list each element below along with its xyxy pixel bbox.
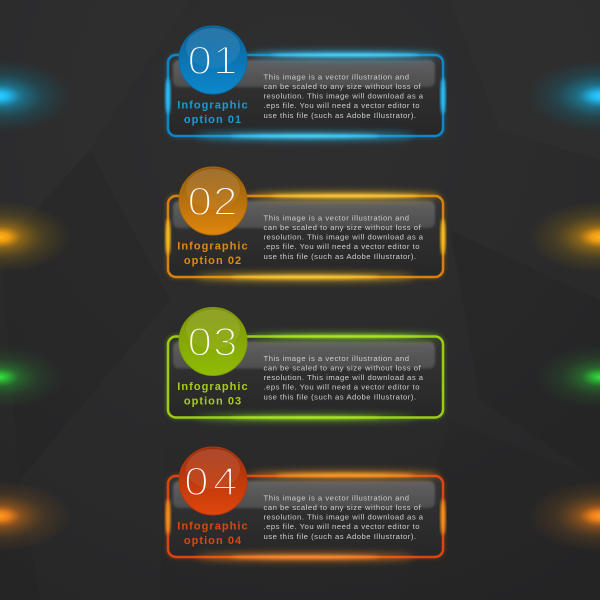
icon: number badge 01: 01 <box>187 38 239 83</box>
label: Infographic option 02: Infographic <box>177 240 249 252</box>
panel: option 01 <box>166 26 446 140</box>
text block: description: can be scaled to any size without loss of <box>264 82 422 91</box>
icon: number badge 04: 04 <box>184 459 242 504</box>
text block: description: can be scaled to any size without loss of <box>264 503 422 512</box>
label: Infographic option 01: Infographic <box>177 100 249 112</box>
icon: number badge 04 <box>179 447 247 515</box>
side light: red-orange right <box>528 480 600 552</box>
panel: option 02 <box>166 167 446 280</box>
text block: description: use this file (such as Adobe Illustrator). <box>264 252 417 261</box>
text block: description: can be scaled to any size without loss of <box>264 364 422 372</box>
text block: description: This image is a vector illustration and <box>264 214 409 222</box>
label: Infographic option 02: option 02 <box>184 255 242 267</box>
panel: option 04 <box>166 447 446 560</box>
text block: description: .eps file. You will need a vector editor to <box>264 101 420 110</box>
label: Infographic option 03: Infographic <box>177 381 249 393</box>
side light: green left <box>0 345 64 409</box>
side light: red-orange left <box>0 480 72 552</box>
text block: description: This image is a vector illustration and <box>264 354 409 363</box>
text block: description: use this file (such as Adobe Illustrator). <box>264 392 417 402</box>
label: Infographic option 03: option 03 <box>184 396 242 408</box>
panel: option 03 <box>168 308 443 420</box>
icon: number badge 02 <box>179 167 247 235</box>
icon: number badge 01 <box>179 26 247 94</box>
text block: description: use this file (such as Adobe Illustrator). <box>264 111 417 120</box>
text block: description: .eps file. You will need a vector editor to <box>264 242 420 251</box>
text block: description: can be scaled to any size without loss of <box>264 223 422 232</box>
text block: description: resolution. This image will download as a <box>264 512 424 522</box>
side light: blue right <box>528 60 600 132</box>
label: Infographic option 01: option 01 <box>184 114 242 126</box>
text block: description: .eps file. You will need a vector editor to <box>264 522 420 531</box>
text block: description: resolution. This image will download as a <box>264 232 424 242</box>
text block: description: .eps file. You will need a vector editor to <box>264 382 420 392</box>
side light: orange right <box>528 201 600 273</box>
icon: number badge 03 <box>179 308 247 376</box>
icon: number badge 02: 02 <box>187 179 239 224</box>
label: Infographic option 04: Infographic <box>177 520 249 532</box>
text block: description: This image is a vector illustration and <box>264 72 409 82</box>
text block: description: This image is a vector illustration and <box>264 494 409 502</box>
text block: description: resolution. This image will download as a <box>264 373 424 382</box>
icon: number badge 03: 03 <box>187 319 239 364</box>
side light: blue left <box>0 60 72 132</box>
side light: green right <box>536 345 600 409</box>
side light: orange left <box>0 201 72 273</box>
label: Infographic option 04: option 04 <box>184 535 242 547</box>
text block: description: use this file (such as Adobe Illustrator). <box>264 532 417 541</box>
text block: description: resolution. This image will download as a <box>264 92 424 100</box>
